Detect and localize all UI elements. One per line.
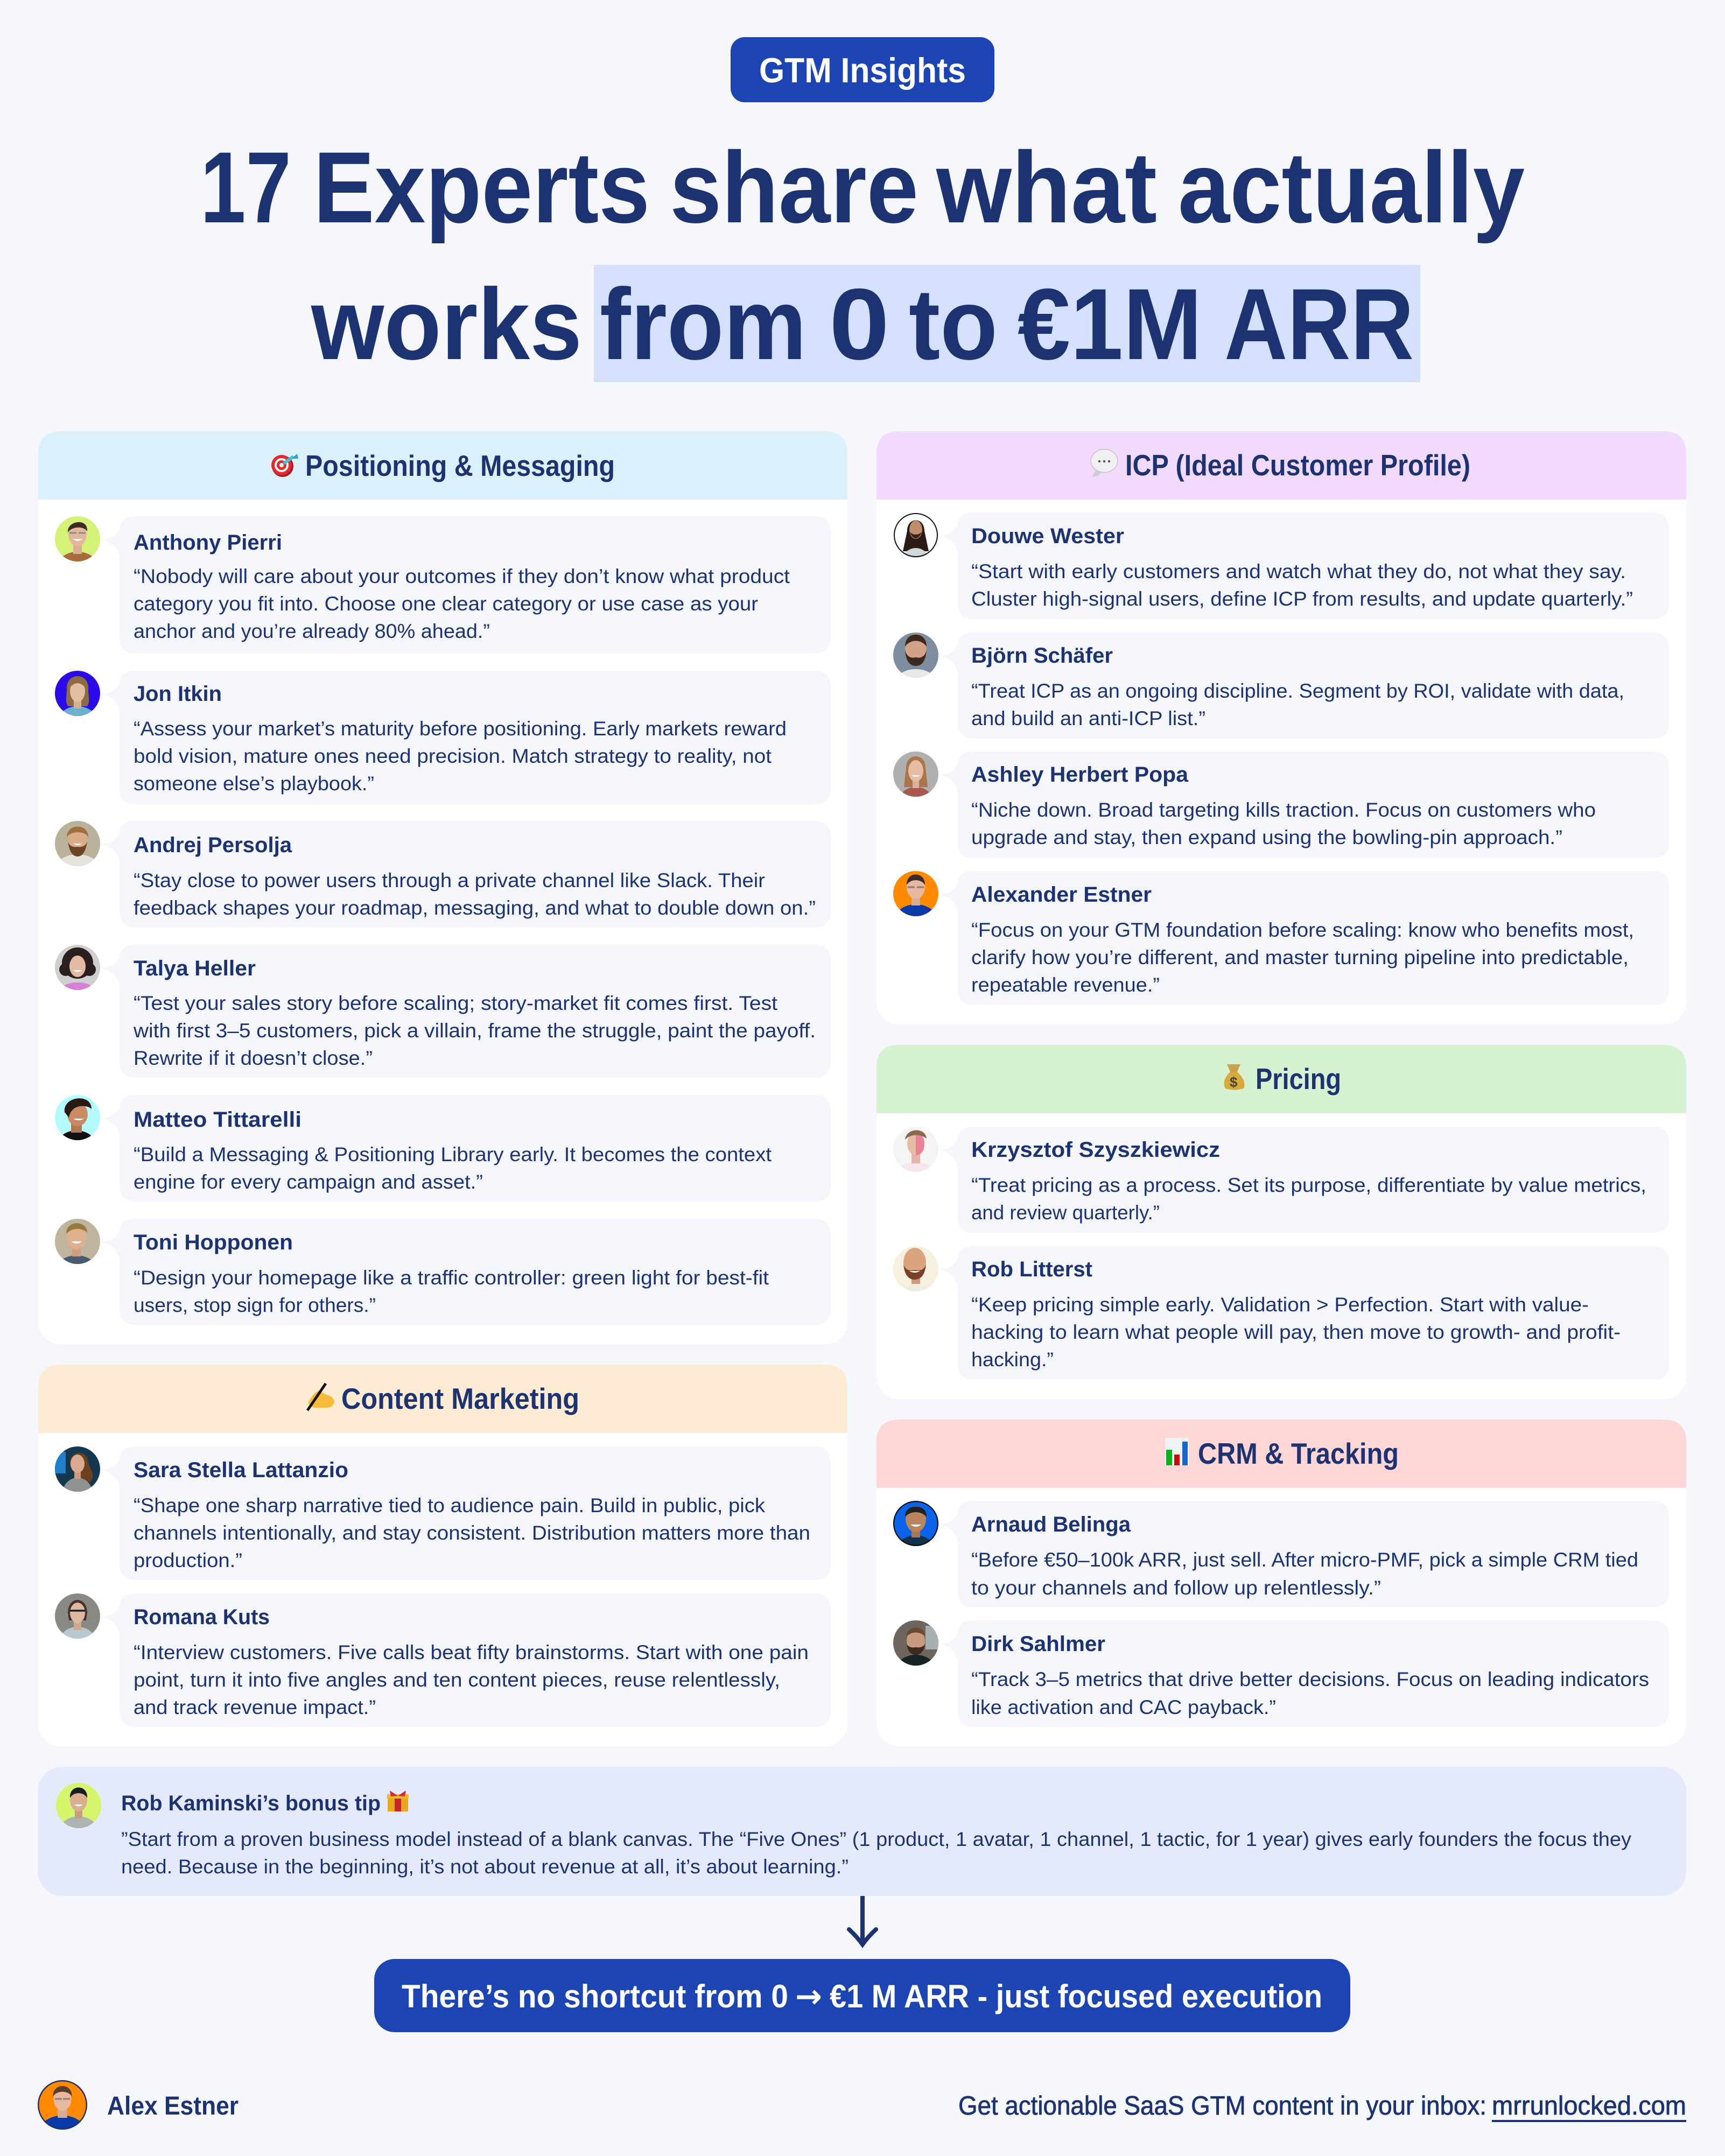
name: Ashley Herbert Popa [971,763,1189,786]
quote [971,679,1624,729]
title: 17 [200,131,291,244]
title: ARR [1224,268,1414,381]
expert: Alexander Estner [893,871,1669,1005]
quote: “Track 3–5 metrics that drive better decisions. Focus on leading indicators [971,1668,1649,1690]
name: Andrej Persolja [134,833,292,857]
quote: “Test your sales story before scaling; story-market fit comes first. Test [134,992,778,1014]
icon: writing hand [307,1384,334,1410]
avatar: Alexander Estner [893,871,938,932]
quote bubble [100,516,831,654]
avatar: Toni Hopponen [55,1219,100,1264]
quote: Rewrite if it doesn’t close.” [134,1047,373,1069]
quote: engine for every campaign and asset.” [134,1170,483,1193]
panel header: ICP: ICP (Ideal Customer Profile) [1125,448,1470,482]
name: Alexander Estner [971,883,1152,907]
quote [971,918,1634,996]
quote bubble [100,1446,831,1580]
quote [134,717,787,795]
quote [134,1641,809,1718]
quote: feedback shapes your roadmap, messaging, and what to double down on.” [134,896,816,919]
quote bubble [100,821,831,928]
title: €1M [1018,268,1202,381]
expert: Björn Schäfer [893,633,1669,739]
quote: “Focus on your GTM foundation before scaling: know who benefits most, [971,918,1634,941]
icon: money bag [1224,1064,1245,1090]
bonus quote [121,1828,1631,1878]
panel: ICP (Ideal Customer Profile) [876,431,1686,1024]
avatar: Krzysztof Szyszkiewicz [893,1127,938,1186]
title: share [670,131,918,244]
icon: gift [387,1790,409,1811]
avatar: Sara Stella Lattanzio [55,1446,100,1510]
panel header: Content Marketing [38,1365,847,1433]
avatar: Rob Litterst [893,1246,938,1304]
quote: to your channels and follow up relentlessly.” [971,1576,1381,1599]
name: Dirk Sahlmer [971,1632,1105,1656]
quote: “Keep pricing simple early. Validation > Perfection. Start with value- [971,1293,1589,1316]
quote [134,565,790,642]
quote: “Shape one sharp narrative tied to audience pain. Build in public, pick [134,1494,765,1516]
title: Experts [313,131,650,244]
quote: “Design your homepage like a traffic controller: green light for best-fit [134,1266,769,1289]
quote: and build an anti-ICP list.” [971,707,1205,729]
arrow: down to conclusion [849,1896,876,1944]
bonus quote: need. Because in the beginning, it’s not about revenue at all, it’s about learning.” [121,1855,849,1878]
avatar: Anthony Pierri [55,516,100,561]
avatar: Talya Heller [55,945,100,990]
panel header: Pricing: Pricing [1256,1062,1341,1095]
avatar: Andrej Persolja [55,821,100,866]
avatar: Björn Schäfer [893,633,938,693]
expert: Krzysztof Szyszkiewicz [893,1127,1669,1233]
quote: channels intentionally, and stay consistent. Distribution matters more than [134,1521,810,1544]
avatar: Alex Estner [38,2080,87,2146]
expert: Sara Stella Lattanzio [55,1446,831,1580]
footer: author [38,2080,239,2146]
quote [971,1174,1646,1224]
expert: Romana Kuts [55,1593,831,1727]
quote [971,1668,1649,1718]
quote: like activation and CAC payback.” [971,1696,1276,1718]
name: Matteo Tittarelli [134,1108,301,1132]
quote [134,1494,810,1571]
title: 0 [829,268,889,381]
quote: clarify how you’re different, and master turning pipeline into predictable, [971,946,1629,968]
footer: author: Alex Estner [107,2092,239,2120]
quote: “Nobody will care about your outcomes if they don’t know what product [134,565,790,587]
quote bubble [100,1095,831,1202]
name: Sara Stella Lattanzio [134,1458,348,1482]
quote: “Before €50–100k ARR, just sell. After micro-PMF, pick a simple CRM tied [971,1548,1638,1571]
expert: Jon Itkin [55,671,831,804]
quote: “Build a Messaging & Positioning Library early. It becomes the context [134,1143,772,1165]
quote: point, turn it into five angles and ten content pieces, reuse relentlessly, [134,1668,780,1691]
expert: Douwe Wester [893,512,1669,619]
title: what [936,131,1157,244]
quote [971,1548,1638,1599]
panel header: Pricing [876,1045,1686,1113]
quote bubble [938,752,1669,858]
footer: call to action: Get actionable SaaS GTM content in your inbox: [958,2091,1486,2120]
quote bubble [100,945,831,1078]
name: Douwe Wester [971,524,1124,548]
panel header: CRM & Tracking: CRM & Tracking [1198,1437,1399,1470]
title [200,131,1525,382]
panel header: Content Marketing: Content Marketing [341,1382,579,1415]
quote: repeatable revenue.” [971,973,1160,996]
quote: anchor and you’re already 80% ahead.” [134,620,490,642]
avatar: Rob Kaminski [56,1783,101,1846]
icon: money bag: $ [1230,1074,1238,1090]
quote: and track revenue impact.” [134,1696,376,1718]
quote: hacking.” [971,1348,1054,1371]
name: Björn Schäfer [971,644,1113,668]
name: Anthony Pierri [134,531,282,554]
quote: users, stop sign for others.” [134,1294,376,1316]
quote bubble [100,671,831,804]
title: to [909,268,998,381]
quote: “Niche down. Broad targeting kills traction. Focus on customers who [971,798,1596,821]
avatar: Matteo Tittarelli [55,1095,100,1140]
expert: Matteo Tittarelli [55,1095,831,1202]
title: works [311,268,582,381]
quote: category you fit into. Choose one clear category or use case as your [134,592,758,615]
expert: Anthony Pierri [55,516,831,654]
panel: Pricing [876,1045,1686,1399]
quote bubble [938,1246,1669,1380]
quote: Cluster high-signal users, define ICP from results, and update quarterly.” [971,587,1633,610]
name: Rob Litterst [971,1258,1092,1281]
title: actually [1178,131,1525,244]
quote bubble [100,1593,831,1727]
expert: Rob Litterst [893,1246,1669,1380]
quote bubble [938,871,1669,1005]
quote [134,1266,769,1316]
name: Krzysztof Szyszkiewicz [971,1138,1220,1162]
avatar: Jon Itkin [55,671,100,716]
quote [134,869,816,919]
badge: GTM Insights [731,37,994,102]
avatar: Ashley Herbert Popa [893,752,938,815]
bonus quote: ”Start from a proven business model instead of a blank canvas. The “Five Ones” (1 product, 1 avatar, 1 channel, 1 tactic, for 1 year) gives early founders the focus they [121,1828,1631,1850]
quote [971,560,1633,610]
avatar: Arnaud Belinga [893,1501,938,1565]
quote bubble [938,633,1669,739]
badge: GTM Insights: GTM Insights [759,51,966,90]
expert: Talya Heller [55,945,831,1078]
name: Romana Kuts [134,1605,270,1629]
panel: Rob Kaminski's bonus tip [38,1767,1686,1896]
quote: “Start with early customers and watch what they do, not what they say. [971,560,1626,582]
callout: conclusion: There’s no shortcut from 0 [402,1978,788,2014]
quote bubble [100,1219,831,1325]
quote [133,992,816,1069]
panel header: CRM & Tracking [876,1420,1686,1488]
expert: Dirk Sahlmer [893,1620,1669,1727]
callout: conclusion: €1 M ARR - just focused execution [830,1978,1322,2014]
quote: “Interview customers. Five calls beat fifty brainstorms. Start with one pain [134,1641,809,1663]
quote: “Treat pricing as a process. Set its purpose, differentiate by value metrics, [971,1174,1646,1196]
quote bubble [938,512,1669,619]
quote: upgrade and stay, then expand using the bowling-pin approach.” [971,826,1562,848]
avatar: Douwe Wester [893,512,938,576]
quote bubble [938,1620,1669,1727]
title: from [600,268,807,381]
name: Talya Heller [134,957,256,980]
quote: bold vision, mature ones need precision. Match strategy to reality, not [134,745,772,767]
callout: conclusion [374,1959,1350,2032]
panel header: Positioning & Messaging: Positioning & Messaging [305,449,615,482]
footer: call to action: mrrunlocked.com [1492,2091,1686,2120]
quote: with first 3–5 customers, pick a villain, frame the struggle, paint the payoff. [133,1019,816,1042]
panel header: Positioning & Messaging [38,431,847,500]
quote [134,1143,772,1193]
quote: “Treat ICP as an ongoing discipline. Segment by ROI, validate with data, [971,679,1624,702]
name and gift icon: Rob Kaminski’s bonus tip [121,1792,381,1815]
callout: conclusion: → [795,1978,822,2015]
expert: Arnaud Belinga [893,1501,1669,1607]
icon: speech balloon [1091,449,1118,477]
panel: Content Marketing [38,1365,847,1746]
quote bubble [938,1127,1669,1233]
quote: production.” [134,1549,242,1571]
expert: Toni Hopponen [55,1219,831,1325]
quote [971,1293,1621,1371]
expert: Andrej Persolja [55,821,831,928]
expert: Ashley Herbert Popa [893,752,1669,858]
avatar: Romana Kuts [55,1593,100,1657]
quote bubble [938,1501,1669,1607]
panel: CRM & Tracking [876,1420,1686,1746]
panel: Positioning & Messaging [38,431,847,1344]
panel header: ICP [876,431,1686,500]
quote: hacking to learn what people will pay, then move to growth- and profit- [971,1321,1621,1343]
name: Jon Itkin [134,682,222,706]
quote: someone else’s playbook.” [134,772,374,795]
name: Arnaud Belinga [971,1513,1131,1536]
quote: “Stay close to power users through a private channel like Slack. Their [134,869,765,891]
quote: “Assess your market’s maturity before positioning. Early markets reward [134,717,787,740]
quote [971,798,1596,848]
icon: bar chart [1165,1438,1189,1465]
quote: and review quarterly.” [971,1201,1160,1224]
name: Toni Hopponen [134,1231,293,1254]
avatar: Dirk Sahlmer [893,1620,938,1683]
icon: dart target [271,454,298,477]
